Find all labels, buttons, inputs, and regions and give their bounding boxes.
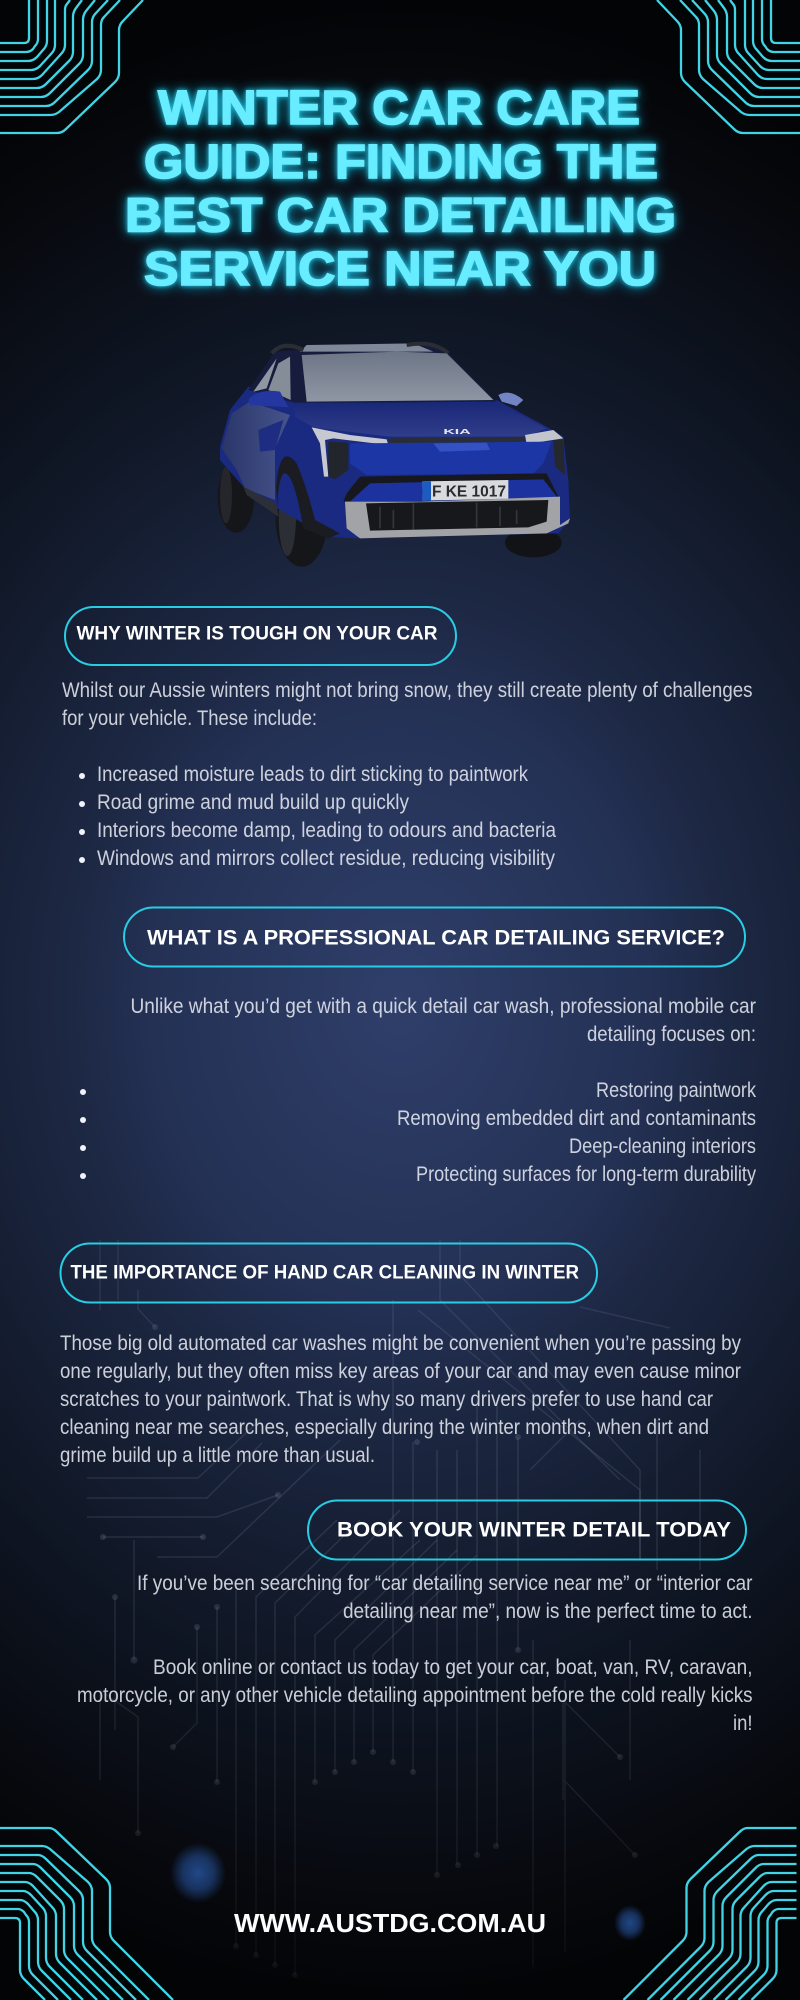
heading: BOOK YOUR WINTER DETAIL TODAY [337,1518,731,1542]
bullet list: Removing embedded dirt and contaminants [397,1107,756,1130]
intro text [130,995,756,1046]
heading: WHY WINTER IS TOUGH ON YOUR CAR [76,624,438,644]
title [125,82,676,296]
corner lines top right [657,0,800,133]
panel: professional detailing [80,908,756,1186]
paragraph two [77,1656,752,1735]
bullet list: Deep-cleaning interiors [569,1135,756,1158]
wheel arch [276,456,340,538]
title: SERVICE NEAR YOU [144,243,656,296]
bumper [345,497,570,538]
intro text: for your vehicle. These include: [62,707,317,730]
mirrors [248,391,288,407]
heading pill [124,908,745,966]
bullet list: Road grime and mud build up quickly [97,791,409,814]
bullet list: Interiors become damp, leading to odours and bacteria [97,819,556,842]
paragraph one: detailing near me”, now is the perfect time to act. [343,1600,752,1623]
heading pill [60,1244,597,1302]
title: WINTER CAR CARE [158,82,640,135]
headlights [312,427,388,477]
paragraph two: in! [733,1712,752,1735]
bullet list [80,1079,756,1186]
heading: WHAT IS A PROFESSIONAL CAR DETAILING SERVICE? [147,926,725,950]
paragraph [60,1332,741,1467]
title: GUIDE: FINDING THE [144,136,658,189]
panel: book your detail [77,1500,752,1735]
paragraph: grime build up a little more than usual. [60,1444,375,1467]
bullet list [79,763,556,870]
bullet list: Windows and mirrors collect residue, reducing visibility [97,847,555,870]
paragraph one: If you’ve been searching for “car detailing service near me” or “interior car [137,1572,752,1595]
number plate: F KE 1017 [432,484,506,501]
heading pill [308,1500,746,1560]
corner lines top left [0,0,143,133]
panel: why winter [62,607,752,870]
paragraph: scratches to your paintwork. That is why so many drivers prefer to use hand car [60,1388,713,1411]
bullet list: Increased moisture leads to dirt sticking to paintwork [97,763,528,786]
background circuit pattern [87,1240,700,1978]
title: BEST CAR DETAILING [125,190,676,242]
footer url: WWW.AUSTDG.COM.AU [234,1908,546,1938]
tyres [218,461,562,567]
bonnet [295,403,547,437]
car image [218,343,570,567]
glow dot right [614,1905,646,1941]
bullet list: Protecting surfaces for long-term durability [416,1163,756,1186]
paragraph one [137,1572,752,1623]
front panel [350,442,552,475]
panel: hand car cleaning [60,1244,741,1467]
kia logo: KIA [443,427,472,436]
corner lines bottom right [624,1828,796,2000]
intro text: detailing focuses on: [587,1023,756,1046]
grille [366,500,548,531]
corner lines bottom left [0,1828,173,2000]
glow dot left [170,1843,226,1903]
car body [220,387,570,538]
bullet list: Restoring paintwork [596,1079,756,1102]
side panel [222,402,290,500]
intro text [62,679,752,730]
paragraph: cleaning near me searches, especially during the winter months, when dirt and [60,1416,709,1439]
paragraph two: Book online or contact us today to get your car, boat, van, RV, caravan, [153,1656,752,1679]
heading: THE IMPORTANCE OF HAND CAR CLEANING IN WINTER [70,1262,579,1284]
paragraph: Those big old automated car washes might be convenient when you’re passing by [60,1332,741,1355]
cabin [248,343,497,403]
intro text: Unlike what you’d get with a quick detail car wash, professional mobile car [130,995,756,1018]
heading pill [65,607,456,665]
